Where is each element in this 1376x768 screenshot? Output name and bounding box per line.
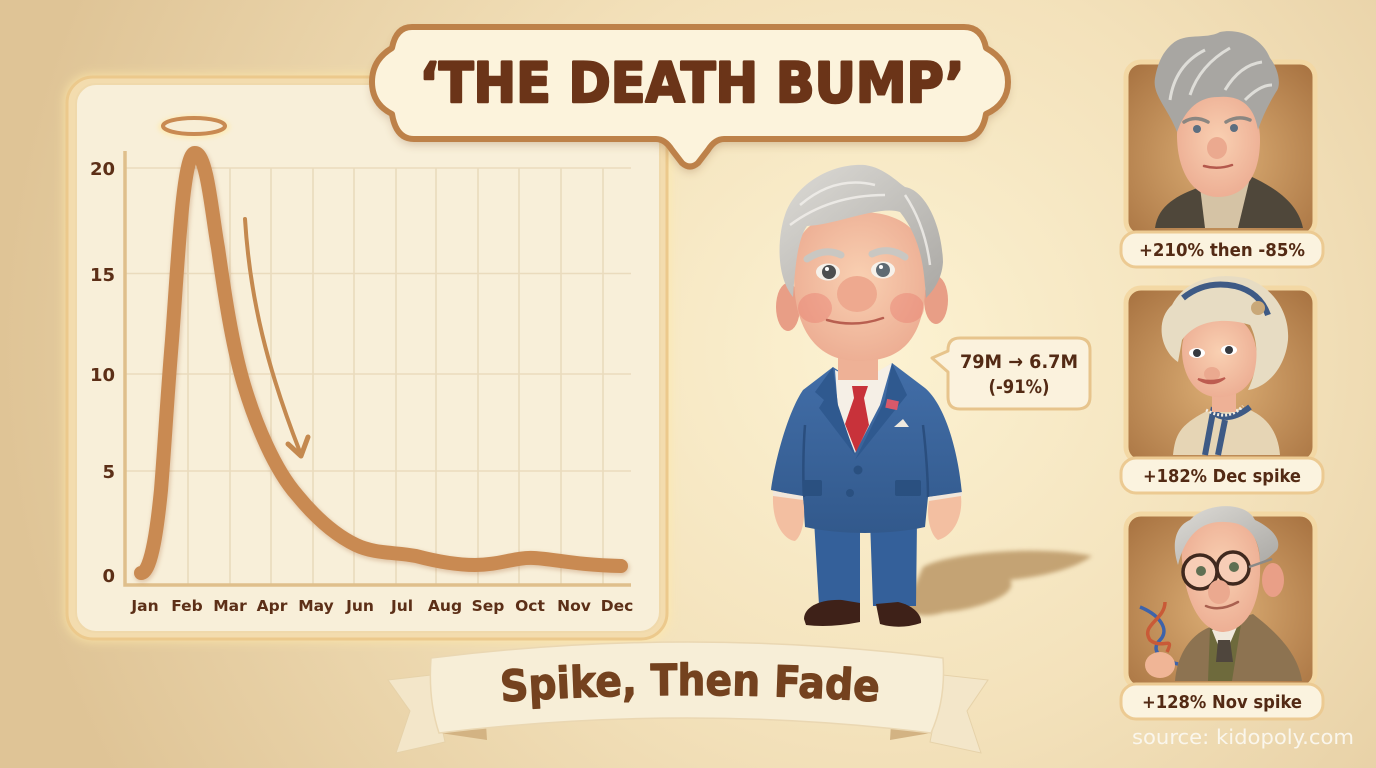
x-axis month labels: Mar xyxy=(213,597,247,615)
x-axis month labels: Jul xyxy=(390,597,413,615)
portrait: grey-haired man in dark jacket xyxy=(1155,31,1303,228)
shirt collar xyxy=(835,363,892,453)
callout first line: 79M → 6.7M xyxy=(960,351,1078,373)
x-axis month labels: Sep xyxy=(472,597,504,615)
necktie xyxy=(845,386,869,452)
suit jacket xyxy=(771,363,962,533)
y-axis labels: 0 xyxy=(102,566,115,587)
y-axis labels: 10 xyxy=(90,365,115,386)
x-axis month labels: Oct xyxy=(515,597,545,615)
shoes xyxy=(804,600,921,627)
chart axes xyxy=(125,151,631,585)
sleeve seams xyxy=(803,425,928,497)
ears xyxy=(776,283,800,331)
hair xyxy=(780,165,943,298)
hair strands xyxy=(790,182,930,265)
label pill xyxy=(1121,458,1323,493)
portrait: blonde woman with pearls xyxy=(1162,276,1288,455)
portrait card 1 xyxy=(1121,31,1323,267)
main figure: man in blue suit xyxy=(771,165,1092,627)
title text: ‘THE DEATH BUMP’ xyxy=(420,51,964,115)
ribbon left tail xyxy=(388,675,445,753)
x-axis month labels: Dec xyxy=(601,597,633,615)
label text: +128% Nov spike xyxy=(1142,693,1302,713)
nose xyxy=(837,276,877,312)
portrait card 3 xyxy=(1121,506,1323,719)
x-axis month labels: Jun xyxy=(345,597,374,615)
label pill xyxy=(1121,232,1323,267)
source credit: source: kidopoly.com xyxy=(1132,725,1354,749)
neck xyxy=(838,345,878,380)
x-axis month labels: Aug xyxy=(428,597,462,615)
head xyxy=(776,165,948,380)
eyebrows xyxy=(807,251,905,259)
label pill xyxy=(1121,684,1323,719)
pocket square xyxy=(894,419,909,427)
x-axis month labels xyxy=(130,597,633,615)
label text: +182% Dec spike xyxy=(1143,467,1301,487)
eyes xyxy=(816,264,840,280)
portrait hair strands xyxy=(1170,48,1272,100)
figure ground shadow xyxy=(905,551,1092,615)
label text: +210% then -85% xyxy=(1139,241,1305,261)
ribbon right tail xyxy=(930,675,988,753)
ribbon band xyxy=(430,642,943,733)
x-axis month labels: Feb xyxy=(171,597,203,615)
halo above peak xyxy=(158,115,230,139)
jacket buttons and pockets xyxy=(803,466,921,497)
x-axis month labels: Nov xyxy=(557,597,591,615)
portrait card 2 xyxy=(1121,276,1323,493)
x-axis month labels: May xyxy=(298,597,334,615)
face xyxy=(794,212,925,361)
title plaque xyxy=(372,27,1008,172)
cheeks xyxy=(798,293,832,323)
hands xyxy=(773,496,961,541)
ribbon text: Spike, Then Fade xyxy=(502,662,878,710)
callout: 79M to 6.7M xyxy=(932,338,1090,409)
arrow: downward fade xyxy=(245,219,308,456)
trousers xyxy=(814,520,917,606)
jacket lapels xyxy=(815,363,907,460)
x-axis month labels: Jan xyxy=(130,597,159,615)
line chart: attention spike and fade xyxy=(141,153,622,575)
flag pin xyxy=(885,399,899,410)
bottom ribbon banner xyxy=(389,642,988,754)
x-axis month labels: Apr xyxy=(257,597,288,615)
panel: chart xyxy=(64,74,670,642)
y-axis labels: 15 xyxy=(90,265,115,286)
mouth xyxy=(827,318,883,324)
shirt cuffs xyxy=(773,491,962,501)
y-axis labels xyxy=(90,159,115,587)
portrait: man with glasses holding DNA xyxy=(1140,506,1302,681)
y-axis labels: 20 xyxy=(90,159,115,180)
y-axis labels: 5 xyxy=(102,462,115,483)
callout second line: (-91%) xyxy=(988,376,1050,398)
